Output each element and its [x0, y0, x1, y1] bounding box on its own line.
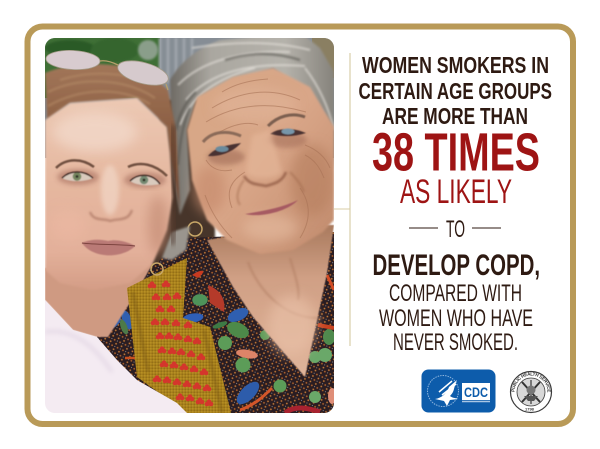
older woman's silver hair	[170, 36, 334, 215]
younger woman's white sleeve	[45, 300, 187, 413]
photo: two women embracing	[45, 36, 336, 413]
statistic headline	[358, 52, 552, 129]
mustard knitted vest	[127, 258, 231, 413]
comparison text: NEVER SMOKED.	[393, 329, 518, 356]
"to" with side rules	[409, 216, 501, 243]
younger woman's earring	[151, 263, 163, 275]
younger woman's neck	[45, 263, 153, 337]
statistic headline: ARE MORE THAN	[382, 103, 528, 129]
older woman's brows and eyes	[203, 115, 307, 165]
older woman's nose	[237, 130, 304, 205]
younger woman's hair	[45, 64, 180, 210]
logo: Public Health Service seal	[510, 370, 552, 414]
photo background foliage and fence	[45, 38, 334, 158]
older woman's face	[187, 68, 334, 254]
comparison text	[379, 280, 533, 356]
older woman's patterned dress	[97, 232, 336, 413]
statistic headline: WOMEN SMOKERS IN	[362, 52, 549, 78]
older woman's neck	[207, 225, 334, 377]
logo: Public Health Service seal: 1798	[525, 406, 535, 412]
shading between the two faces	[172, 125, 175, 245]
younger woman's nose	[90, 165, 132, 221]
younger woman's brows and eyes	[56, 160, 167, 188]
older woman's earring	[188, 222, 202, 236]
dark hair and shadow behind both women	[148, 99, 217, 270]
younger woman's face	[45, 98, 173, 290]
comparison text: COMPARED WITH	[389, 280, 522, 307]
as likely: AS LIKELY	[400, 173, 512, 211]
younger woman's lips	[82, 240, 135, 255]
"to" with side rules: TO	[446, 216, 465, 243]
grey hair wisps beside neck	[162, 226, 190, 260]
logo: Public Health Service seal: PUBLIC HEALTH SERVICE	[511, 372, 551, 392]
eyeglasses on younger woman's head	[46, 49, 171, 90]
logo: HHS and CDC: CDC	[464, 384, 488, 400]
logo: HHS and CDC	[422, 370, 496, 412]
vertical gold divider with connector	[334, 53, 350, 346]
older woman's smile	[245, 200, 298, 215]
older woman's forehead and cheek wrinkles	[205, 79, 330, 238]
